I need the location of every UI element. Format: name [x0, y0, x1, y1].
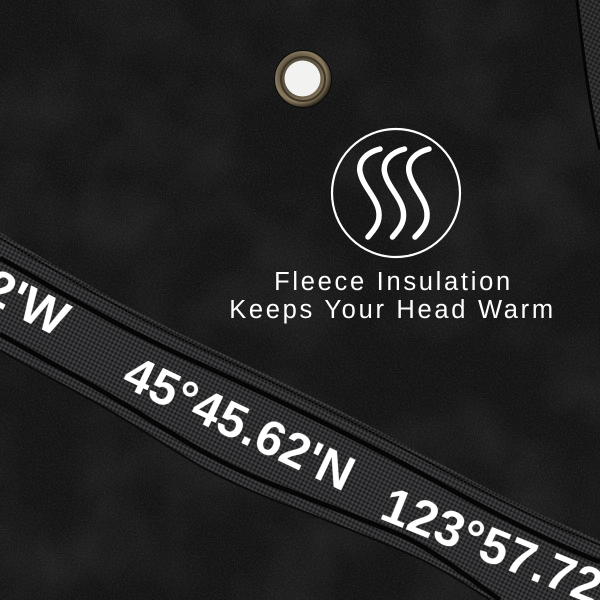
caption text	[229, 268, 556, 324]
ribbon text: latitude: 45°45.62'N	[115, 346, 363, 502]
grommet	[274, 50, 332, 108]
side seam top right	[577, 0, 600, 150]
icon: heat waves in circle	[332, 129, 460, 257]
caption text: Keeps Your Head Warm	[229, 296, 556, 324]
diagonal ribbon	[0, 232, 600, 600]
caption text: Fleece Insulation	[274, 268, 513, 296]
